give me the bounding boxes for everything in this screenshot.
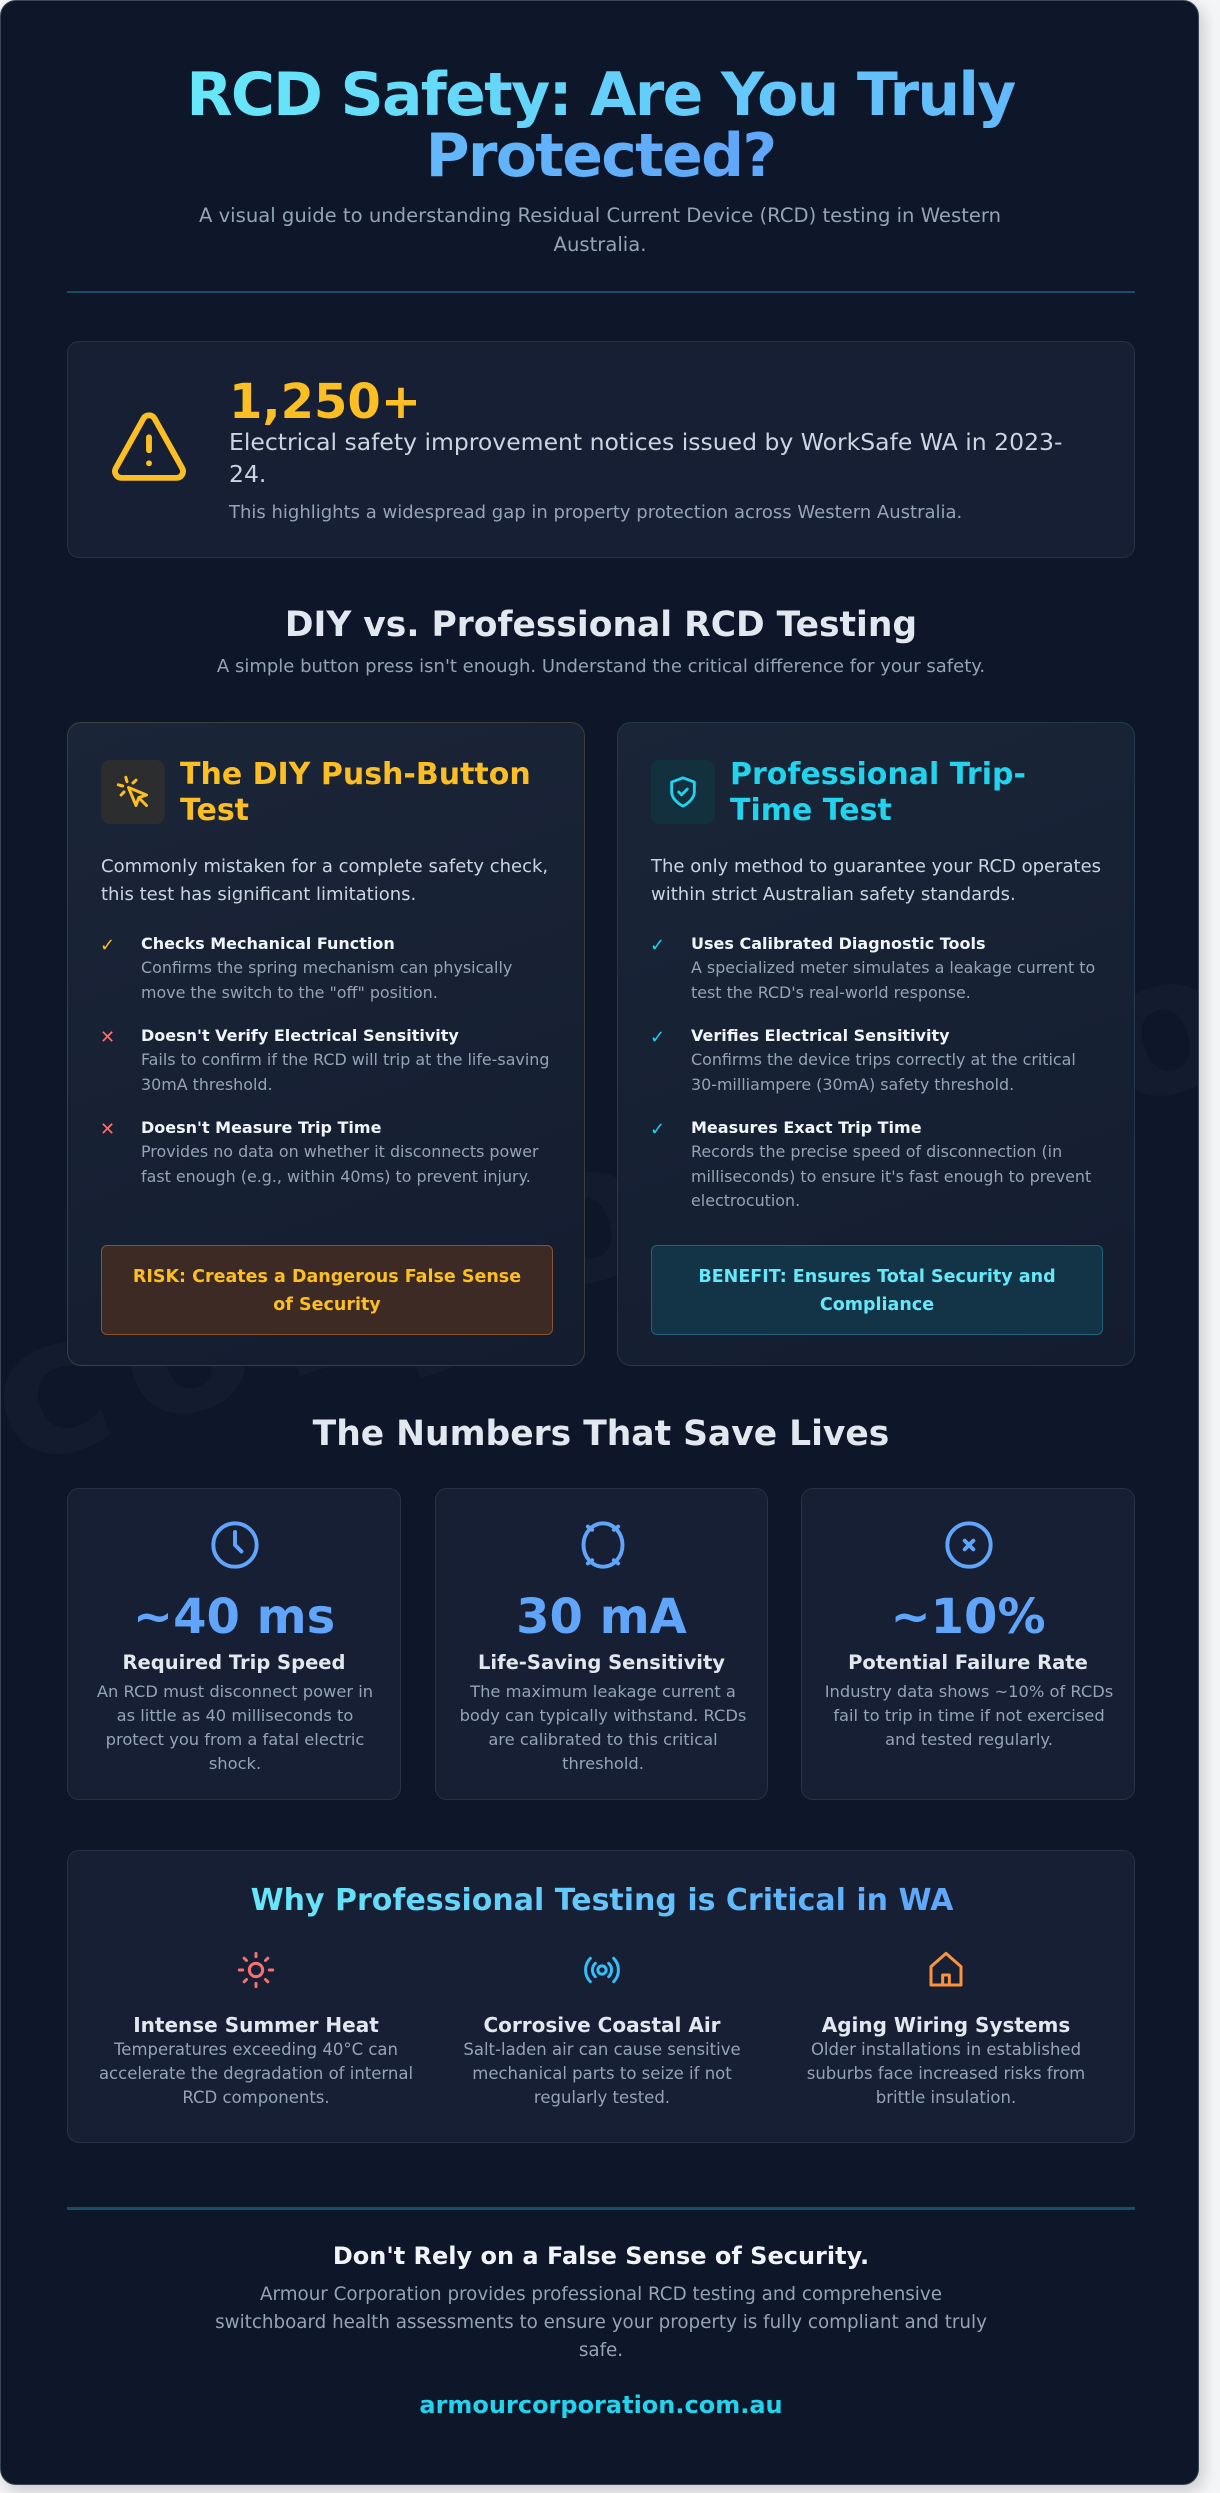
list item: Uses Calibrated Diagnostic Tools bbox=[691, 934, 986, 953]
list item bbox=[650, 934, 1095, 1002]
item: heat bbox=[99, 1952, 413, 2107]
stat card: sensitivity: 30 mA bbox=[516, 1589, 687, 1645]
list item: Verifies Electrical Sensitivity bbox=[691, 1026, 950, 1045]
panel: why critical in WA bbox=[67, 1850, 1135, 2143]
title bbox=[186, 60, 1015, 191]
panel: key statistic bbox=[67, 341, 1135, 558]
icon: signal bbox=[584, 1956, 620, 1984]
list item bbox=[650, 1118, 1091, 1210]
list item: Fails to confirm if the RCD will trip at the life-saving 30mA threshold. bbox=[141, 1050, 549, 1094]
stat card: trip speed bbox=[67, 1488, 401, 1800]
stat description: Electrical safety improvement notices issued by WorkSafe WA in 2023-24. bbox=[229, 428, 1062, 488]
list item: Records the precise speed of disconnection (in milliseconds) to ensure it's fast enough to prevent electrocution. bbox=[691, 1142, 1091, 1210]
list item: Confirms the device trips correctly at the critical 30-milliampere (30mA) safety threshold. bbox=[691, 1050, 1076, 1094]
stat card: trip speed: Required Trip Speed bbox=[122, 1651, 345, 1674]
callout: benefit: BENEFIT: Ensures Total Security and Compliance bbox=[698, 1267, 1056, 1315]
panel: professional test: ✓ bbox=[650, 1119, 665, 1140]
stat note: This highlights a widespread gap in property protection across Western Australia. bbox=[229, 502, 962, 523]
heading: Professional Trip-Time Test bbox=[730, 757, 1026, 828]
list item: Measures Exact Trip Time bbox=[691, 1118, 922, 1137]
list item bbox=[650, 1026, 1076, 1094]
footer link: armourcorporation.com.au bbox=[419, 2391, 783, 2419]
heading: Why Professional Testing is Critical in WA bbox=[251, 1883, 953, 1918]
title: RCD Safety: Are You Truly bbox=[186, 60, 1015, 130]
stat card: sensitivity bbox=[435, 1488, 768, 1800]
stat card: trip speed: ~40 ms bbox=[133, 1589, 335, 1645]
title: Protected? bbox=[426, 121, 775, 191]
list item bbox=[100, 1026, 549, 1094]
list item: Doesn't Measure Trip Time bbox=[141, 1118, 381, 1137]
list item bbox=[100, 934, 512, 1002]
subtitle: A visual guide to understanding Residual Current Device (RCD) testing in Western Australia. bbox=[199, 204, 1001, 256]
list item: Checks Mechanical Function bbox=[141, 934, 395, 953]
footer heading: Don't Rely on a False Sense of Security. bbox=[333, 2242, 869, 2270]
list item: A specialized meter simulates a leakage current to test the RCD's real-world response. bbox=[691, 958, 1095, 1002]
list item: Doesn't Verify Electrical Sensitivity bbox=[141, 1026, 459, 1045]
list item bbox=[100, 1118, 539, 1186]
stat card: failure rate: Potential Failure Rate bbox=[848, 1651, 1088, 1674]
icon: shield bbox=[651, 760, 715, 824]
panel: DIY test: ✕ bbox=[100, 1027, 115, 1048]
stat card: trip speed: An RCD must disconnect power in as little as 40 milliseconds to protect you from a fatal electric shock. bbox=[97, 1682, 373, 1773]
stat card: sensitivity: Life-Saving Sensitivity bbox=[478, 1651, 725, 1674]
panel: DIY test: ✕ bbox=[100, 1119, 115, 1140]
heading: DIY vs Professional: DIY vs. Professional RCD Testing bbox=[285, 605, 917, 645]
stat card: failure rate: Industry data shows ~10% of RCDs fail to trip in time if not exercised and tested regularly. bbox=[825, 1682, 1113, 1749]
footer text: Armour Corporation provides professional RCD testing and comprehensive switchboard health assessments to ensure your property is fully compliant and truly safe. bbox=[215, 2284, 987, 2361]
stat card: failure rate bbox=[801, 1488, 1135, 1800]
callout: risk: RISK: Creates a Dangerous False Sense of Security bbox=[133, 1267, 521, 1315]
stat card: failure rate: ~10% bbox=[890, 1589, 1046, 1645]
icon: clock bbox=[211, 1521, 259, 1569]
subheading: A simple button press isn't enough. Understand the critical difference for your safety. bbox=[217, 656, 985, 677]
icon: ring bbox=[582, 1521, 624, 1569]
heading: The DIY Push-Button Test bbox=[180, 757, 531, 828]
callout: risk bbox=[101, 1245, 553, 1335]
icon: sun bbox=[238, 1952, 274, 1988]
callout: benefit bbox=[651, 1245, 1103, 1335]
stat card: sensitivity: The maximum leakage current a body can typically withstand. RCDs are calibrated to this critical threshold. bbox=[460, 1682, 746, 1773]
panel: DIY test: ✓ bbox=[100, 935, 115, 956]
item: coastal air: Salt-laden air can cause sensitive mechanical parts to seize if not regularly tested. bbox=[463, 2040, 741, 2107]
description: The only method to guarantee your RCD operates within strict Australian safety standards. bbox=[651, 856, 1101, 905]
panel: DIY test bbox=[67, 722, 585, 1366]
item: coastal air bbox=[463, 1956, 741, 2107]
icon: pointer click bbox=[101, 760, 165, 824]
item: aging wiring bbox=[807, 1952, 1085, 2107]
panel: professional test: ✓ bbox=[650, 1027, 665, 1048]
item: aging wiring: Aging Wiring Systems bbox=[822, 2013, 1070, 2037]
stat number: 1,250+ bbox=[229, 374, 421, 430]
item: aging wiring: Older installations in established suburbs face increased risks from brittle insulation. bbox=[807, 2040, 1085, 2107]
item: coastal air: Corrosive Coastal Air bbox=[483, 2013, 721, 2037]
icon: x circle bbox=[945, 1521, 993, 1569]
icon: warning bbox=[112, 412, 186, 481]
item: heat: Intense Summer Heat bbox=[133, 2013, 379, 2037]
panel: professional test: ✓ bbox=[650, 935, 665, 956]
heading: numbers: The Numbers That Save Lives bbox=[313, 1414, 889, 1454]
description: Commonly mistaken for a complete safety check, this test has significant limitations. bbox=[101, 856, 548, 905]
item: heat: Temperatures exceeding 40°C can accelerate the degradation of internal RCD components. bbox=[99, 2040, 413, 2107]
list item: Confirms the spring mechanism can physically move the switch to the "off" position. bbox=[141, 958, 512, 1002]
panel: professional test bbox=[617, 722, 1135, 1366]
list item: Provides no data on whether it disconnects power fast enough (e.g., within 40ms) to prevent injury. bbox=[141, 1142, 539, 1186]
icon: house bbox=[930, 1952, 962, 1986]
